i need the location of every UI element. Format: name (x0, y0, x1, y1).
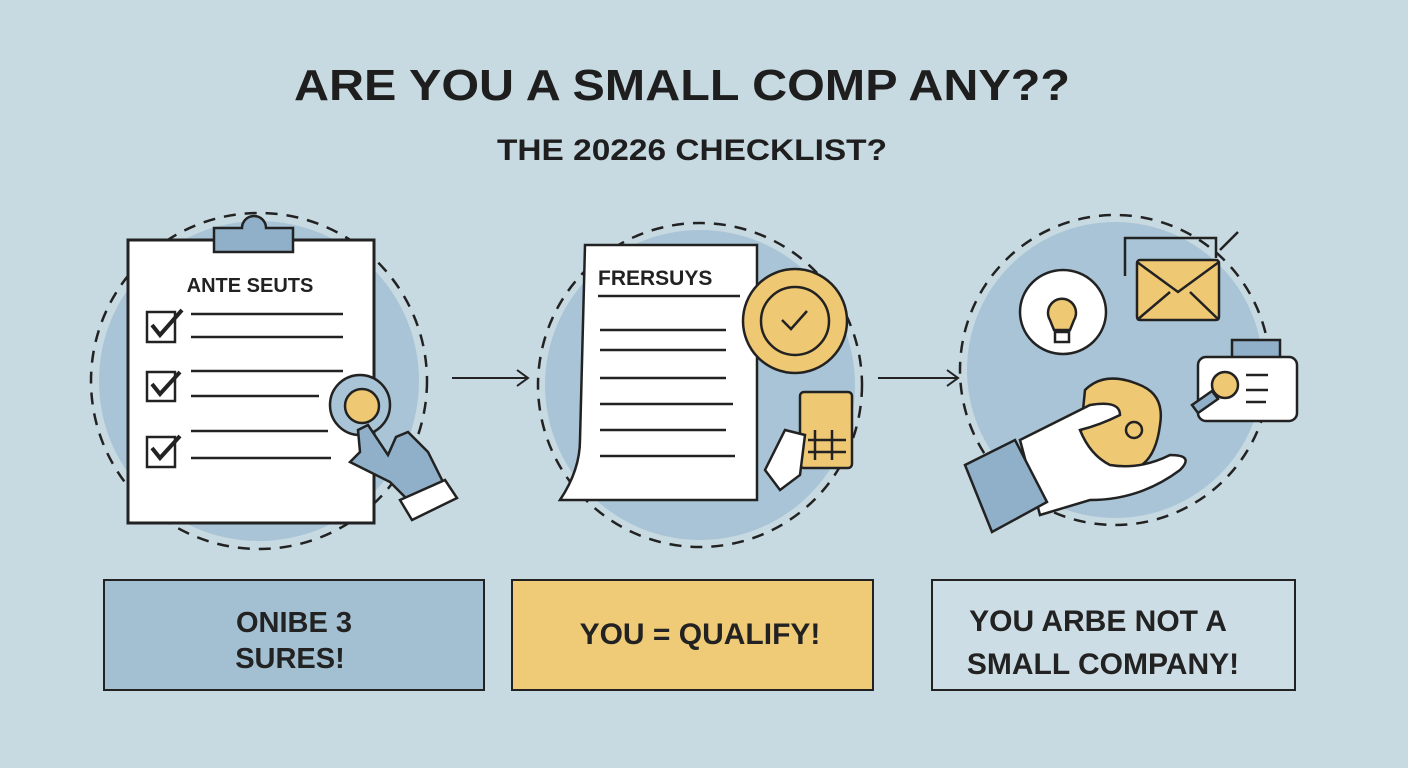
box: blue (104, 580, 484, 690)
icon: clipboard: ANTE SEUTS (187, 275, 313, 297)
arrow 1 (452, 370, 528, 386)
panel: hand and icons (960, 215, 1297, 532)
box: blue: SURES! (235, 643, 345, 675)
icon: lightbulb (1020, 270, 1106, 354)
icon: hand holding gold (965, 379, 1186, 532)
box: outlined: SMALL COMPANY! (967, 648, 1239, 681)
box: blue: ONIBE 3 (236, 607, 352, 639)
icon: document: FRERSUYS (598, 267, 712, 290)
subtitle: THE 20226 CHECKLIST? (497, 134, 887, 167)
icon: gold badge (743, 269, 847, 373)
icon: clipboard (128, 216, 374, 523)
icon: hand with calculator (765, 392, 852, 490)
box: outlined (932, 580, 1295, 690)
box: yellow (512, 580, 873, 690)
icon: pointing hand (330, 375, 457, 520)
icon: envelope (1125, 232, 1238, 320)
box: outlined: YOU ARBE NOT A (969, 605, 1227, 638)
box: yellow: YOU = QUALIFY! (580, 618, 820, 651)
arrow 2 (878, 370, 958, 386)
panel: document (538, 223, 862, 547)
title: ARE YOU A SMALL COMP ANY?? (294, 61, 1070, 110)
icon: id card (1192, 340, 1297, 421)
panel: checklist (91, 213, 457, 549)
icon: document (560, 245, 757, 500)
